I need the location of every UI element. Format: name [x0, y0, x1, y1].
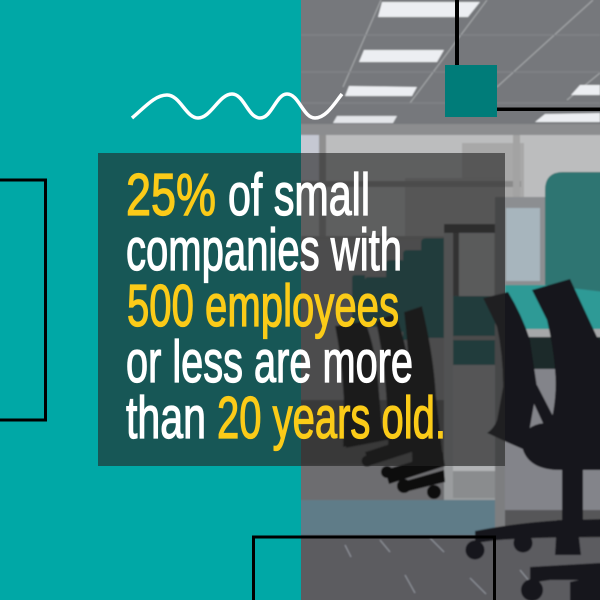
connector line: horizontal: [496, 108, 600, 111]
photo: cubicle walls: [444, 172, 600, 538]
outlined rectangle: bottom: [254, 537, 494, 600]
line 1: 25%: [126, 162, 216, 228]
connector line: vertical: [455, 0, 459, 66]
office photo panel: [295, 0, 600, 600]
line 5: than: [126, 385, 206, 451]
line 5: 20 years old.: [217, 385, 446, 451]
photo: windows: [301, 134, 600, 240]
line 5: [126, 385, 446, 451]
line 1: [126, 162, 370, 228]
line 4: or less are more: [126, 329, 413, 395]
photo: distant teal partitions: [352, 238, 444, 340]
photo: small chairs: [335, 306, 445, 499]
photo: large chairs: [466, 279, 600, 600]
headline statement: [126, 162, 446, 451]
dark translucent text panel: [98, 153, 505, 466]
line 3: 500 employees: [127, 273, 399, 339]
photo: ceiling: [295, 0, 600, 135]
outlined rectangle: left: [0, 180, 46, 420]
white wave line: [132, 94, 342, 118]
line 2: companies with: [126, 217, 402, 283]
photo: aisle wall and floor: [295, 240, 600, 600]
teal background panel: [0, 0, 301, 600]
line 1: of small: [228, 162, 370, 228]
teal square: [445, 65, 497, 117]
